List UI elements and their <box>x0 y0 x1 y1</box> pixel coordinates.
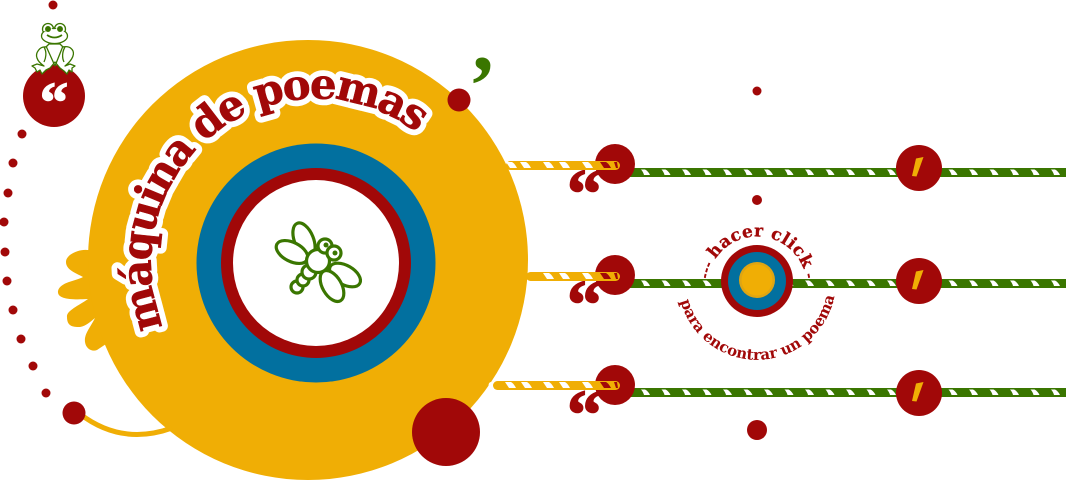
row 3 nodes: “ <box>567 377 602 454</box>
click button <box>721 245 793 317</box>
quote mark: “ <box>40 72 68 134</box>
icon: frog <box>32 24 75 74</box>
para encontrar label: para encontrar un poema <box>678 296 834 360</box>
decorative dots <box>0 0 767 466</box>
row 3 nodes <box>488 365 942 454</box>
main yellow circle <box>88 40 528 480</box>
frog medallion <box>23 24 85 134</box>
row 2 nodes <box>526 255 942 344</box>
title: máquina de poemas <box>112 70 432 338</box>
row 2 nodes: “ <box>567 267 602 344</box>
icon: dragonfly <box>273 220 364 305</box>
row 1 nodes: “ <box>567 156 602 233</box>
title: máquina de poemas <box>117 76 427 332</box>
connector curve <box>80 414 172 434</box>
green striped bars <box>630 168 1066 397</box>
row 1 nodes <box>506 144 942 233</box>
target rings <box>196 144 436 382</box>
splash behind main circle <box>58 250 112 351</box>
